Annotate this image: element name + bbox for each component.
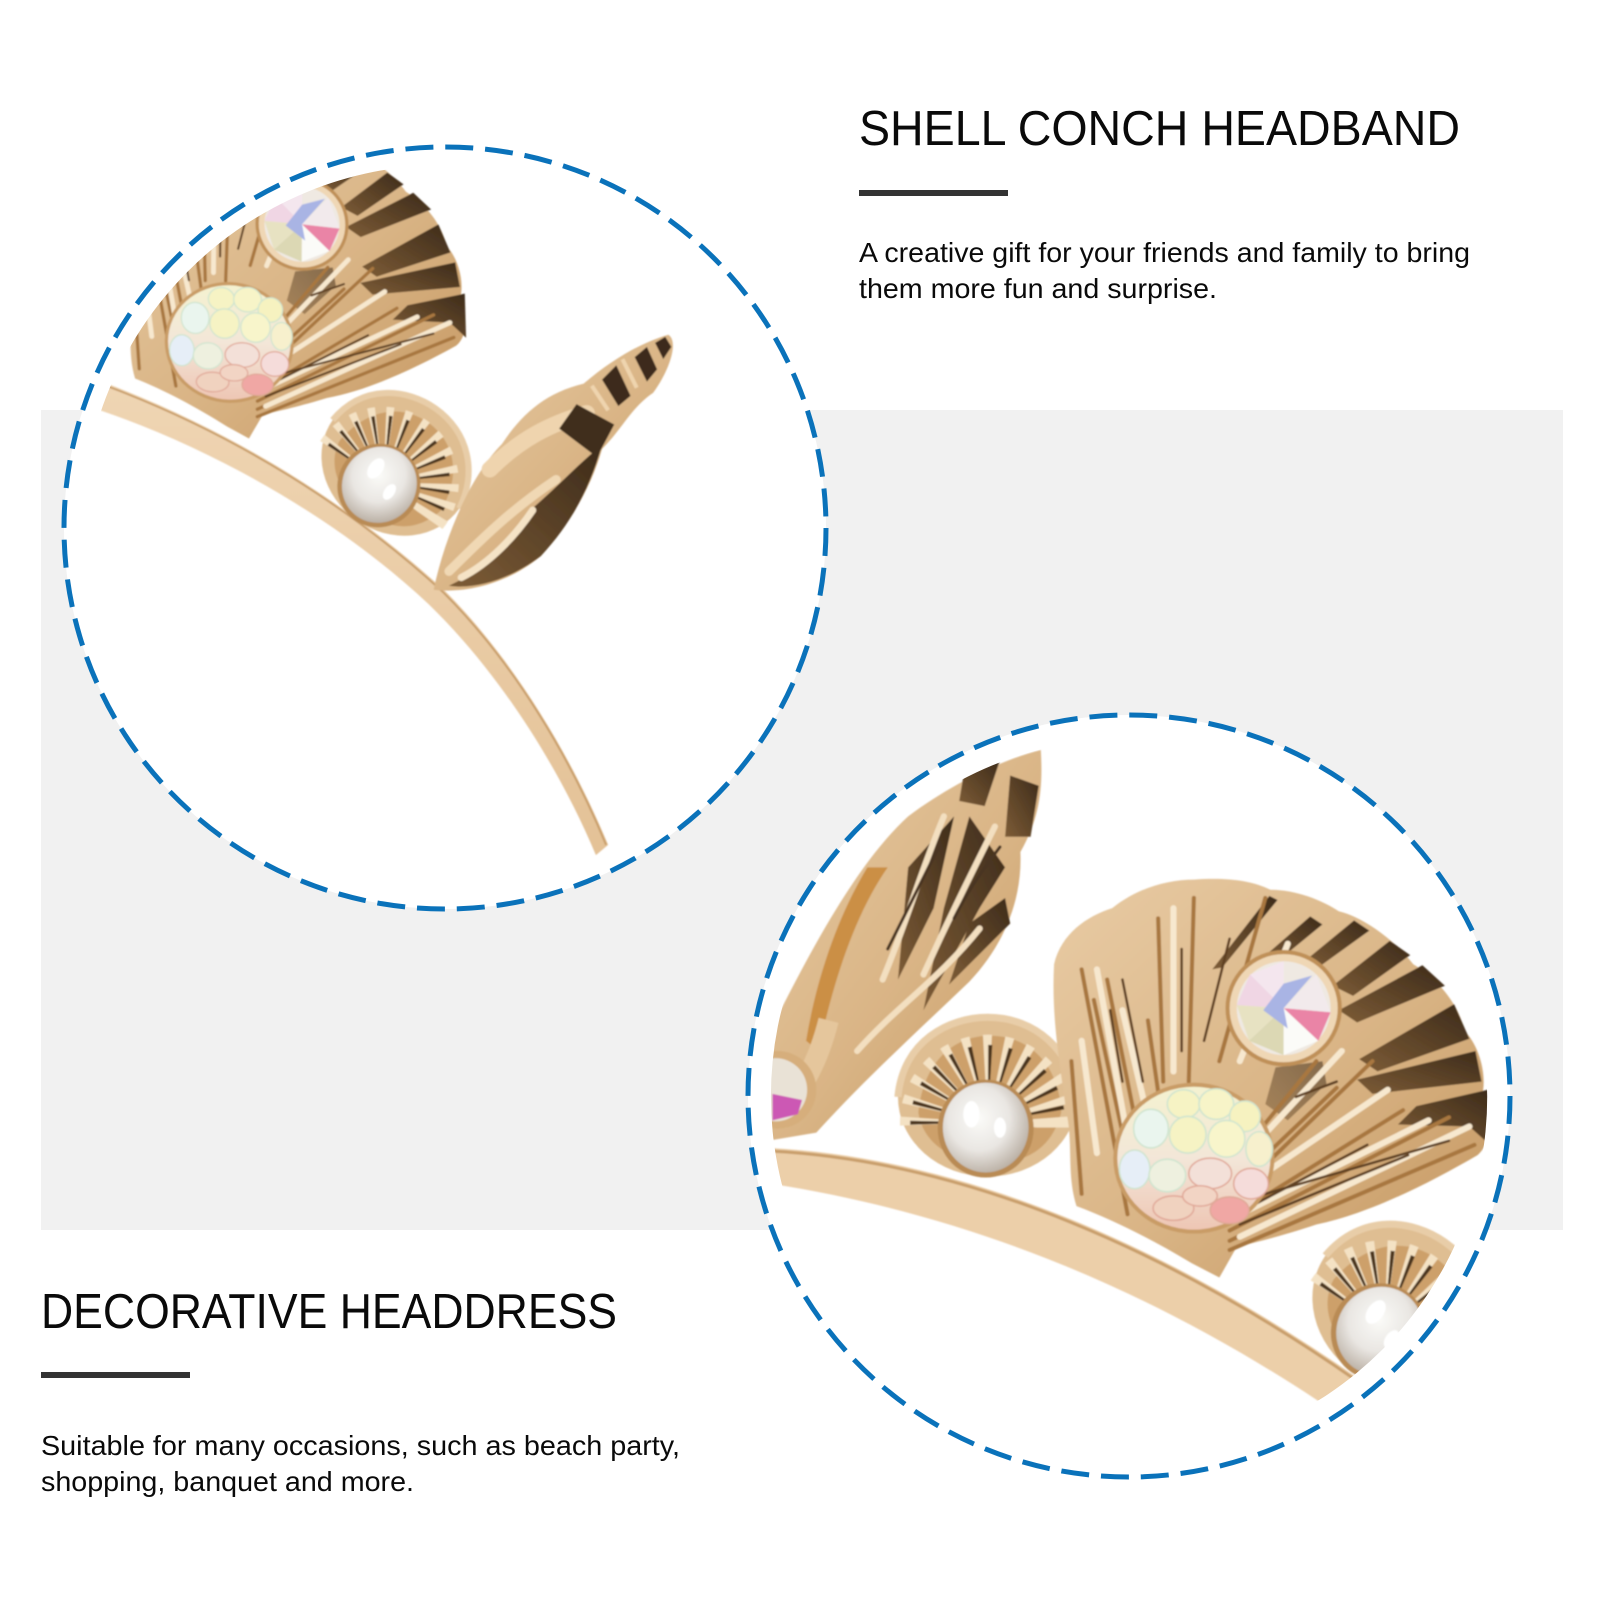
scallop shell: lower view (1054, 879, 1490, 1278)
text block: occasions description: Suitable for many occasions, such as beach party, (41, 1430, 680, 1461)
small shell with pearl: lower left (898, 1017, 1078, 1182)
divider bar: top section (859, 190, 1008, 196)
text block: gift description: A creative gift for your friends and family to bring (859, 237, 1470, 268)
small shell with pearl: lower right (1310, 1220, 1455, 1375)
text block: occasions description (41, 1430, 680, 1497)
text block: gift description (859, 237, 1470, 304)
headband arc: upper view (100, 382, 608, 855)
small shell with pearl: upper view (320, 389, 472, 537)
heading: shell conch headband: SHELL CONCH HEADBAND (859, 102, 1460, 156)
text block: occasions description: shopping, banquet and more. (41, 1466, 414, 1497)
background panel (41, 410, 1563, 1230)
conch shell: lower view (755, 750, 1041, 1143)
heading: decorative headdress: DECORATIVE HEADDRESS (41, 1285, 617, 1339)
panel: upper product circle (64, 116, 826, 909)
panel: lower product circle (739, 715, 1518, 1477)
headband arc: lower view (770, 1148, 1357, 1403)
scallop shell: upper view (130, 170, 468, 439)
conch shell: upper view (434, 335, 673, 591)
text block: gift description: them more fun and surprise. (859, 273, 1217, 304)
divider bar: bottom section (41, 1372, 190, 1378)
gem fragment: left edge (770, 1051, 816, 1128)
